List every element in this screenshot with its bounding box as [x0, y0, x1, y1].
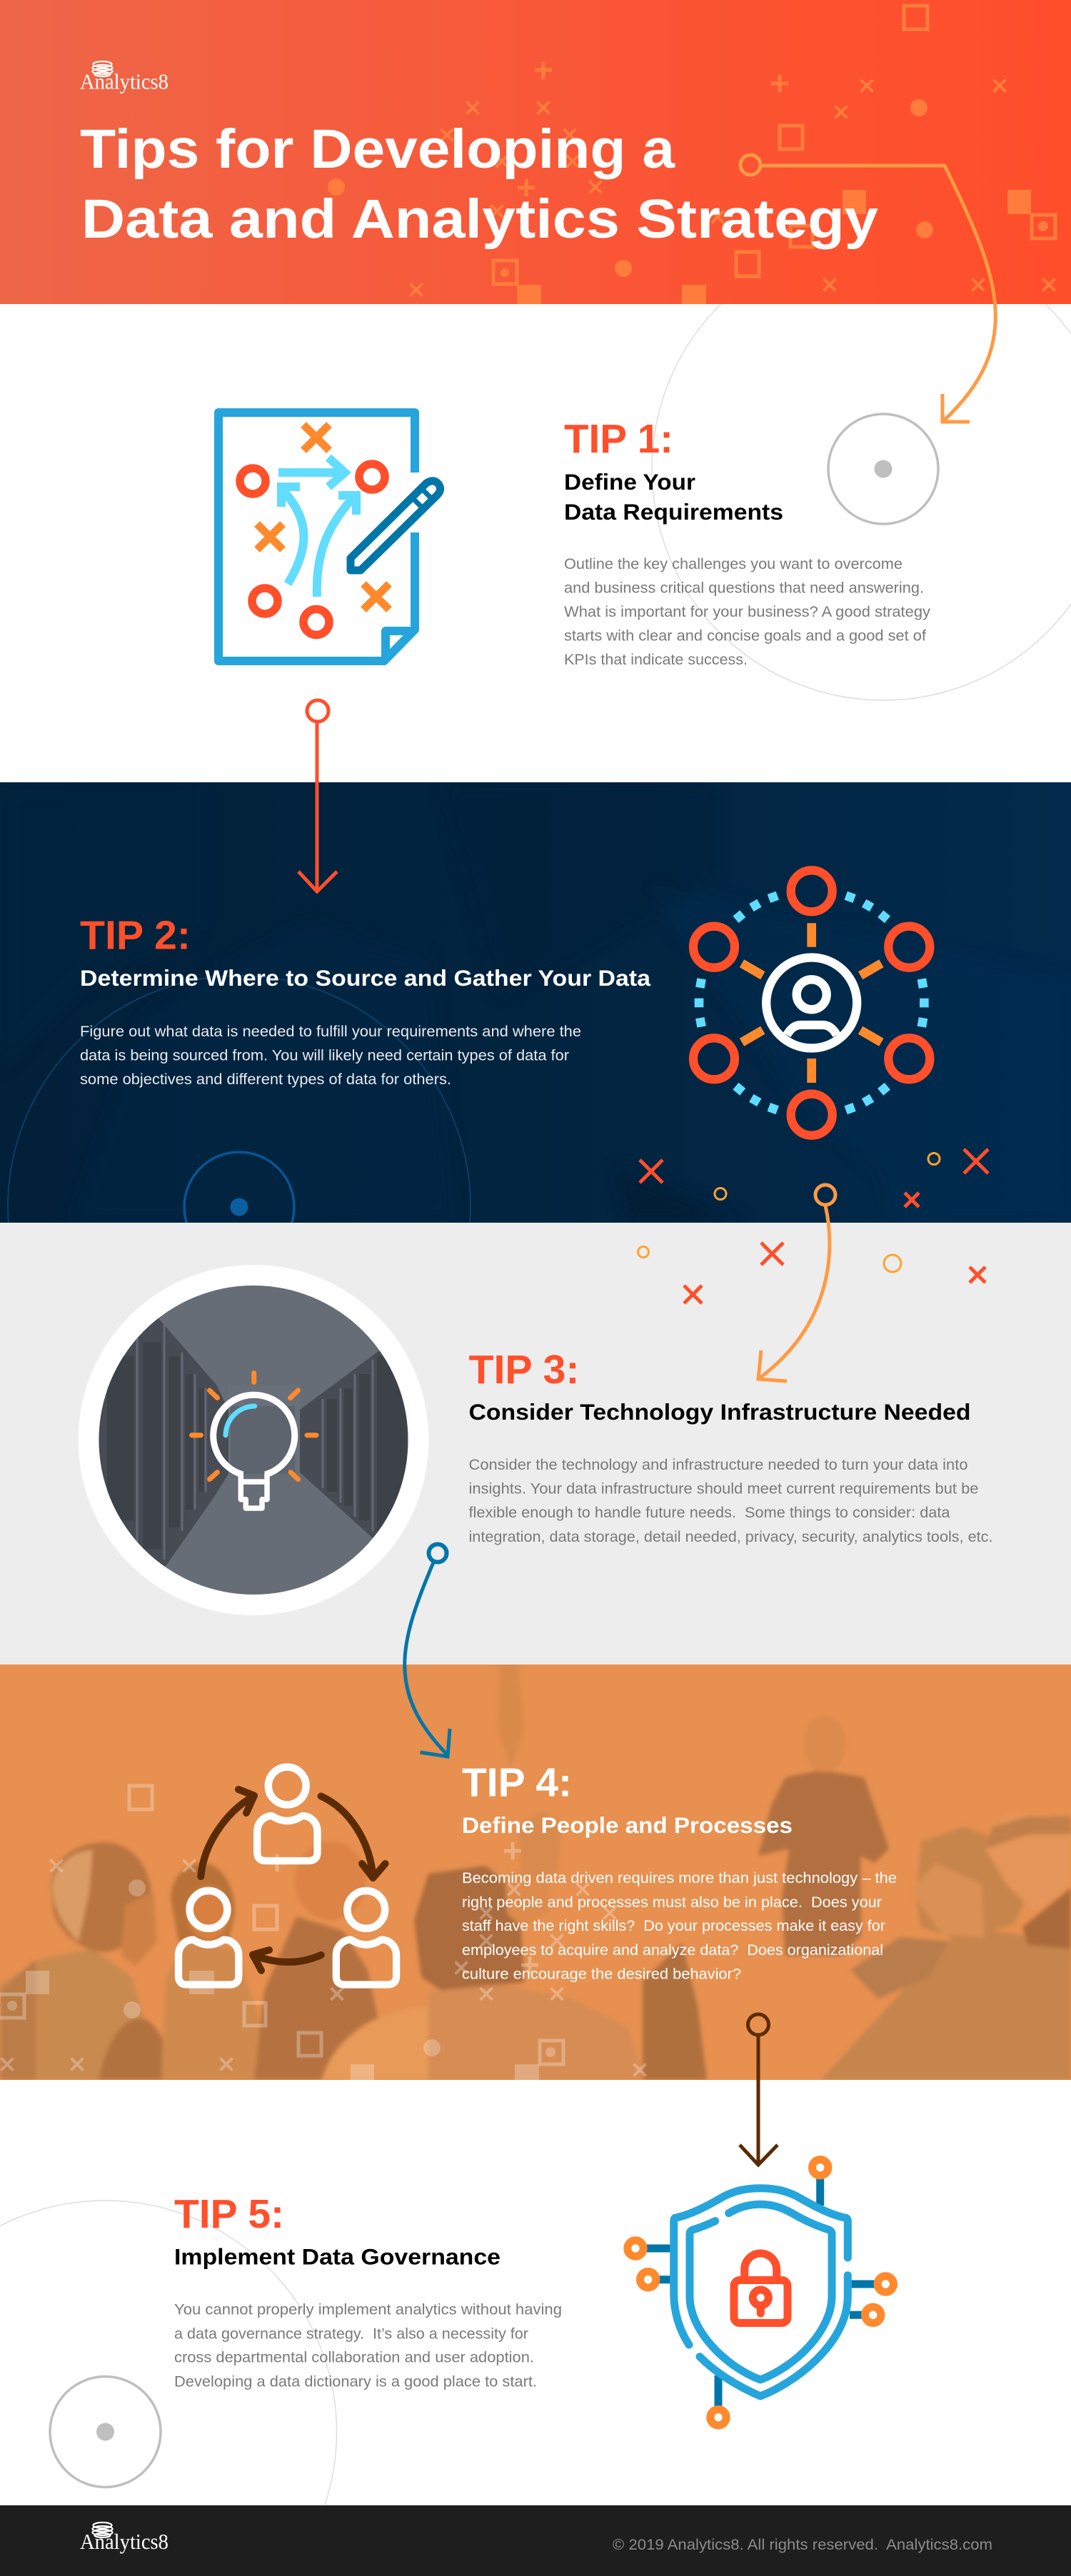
arrow: tip 3 to tip 4 — [405, 1545, 450, 1757]
subheading: tip 1: Data Requirements — [564, 499, 783, 525]
text block: tip 5: Developing a data dictionary is a good place to start. — [174, 2374, 537, 2390]
icon: data source network — [693, 870, 930, 1136]
text block: tip 3: integration, data storage, detail needed, privacy, security, analytics tools, etc. — [468, 1529, 992, 1545]
subheading: tip 3: Consider Technology Infrastructure Needed — [468, 1399, 971, 1425]
panel: tip 3 — [0, 1223, 1071, 1665]
text block: tip 5 — [174, 2301, 562, 2390]
text block: tip 1: KPIs that indicate success. — [564, 652, 748, 668]
arrow: tip 4 to tip 5 — [740, 2014, 778, 2165]
heading: tip 3: TIP 3: — [468, 1347, 580, 1393]
text block: tip 1: starts with clear and concise goals and a good set of — [564, 628, 926, 644]
text block: tip 5: a data governance strategy. It’s also a necessity for — [174, 2325, 528, 2343]
decorative markers: tip 2 — [640, 1149, 988, 1207]
text block: tip 3 — [468, 1457, 992, 1545]
text block: tip 4: right people and processes must also be in place. Does your — [462, 1894, 882, 1911]
icon: lightbulb — [191, 1373, 316, 1508]
photo circle: data center corridor — [79, 1265, 428, 1615]
subheading: tip 2: Determine Where to Source and Gather Your Data — [80, 965, 651, 991]
text block: tip 2 — [80, 1024, 581, 1088]
decorative pattern: squares and crosses — [0, 1786, 645, 2076]
text block: tip 3: Consider the technology and infrastructure needed to turn your data into — [468, 1457, 968, 1473]
subheading: tip 5: Implement Data Governance — [174, 2244, 501, 2270]
arrow: header to tip 1 — [740, 155, 995, 422]
text block: tip 1: What is important for your business? A good strategy — [564, 604, 931, 620]
heading: tip 4: TIP 4: — [462, 1760, 572, 1806]
text block: tip 4: Becoming data driven requires more than just technology – the — [462, 1870, 897, 1886]
text block: tip 1: Outline the key challenges you want to overcome — [564, 556, 902, 572]
decorative markers: tip 3 — [638, 1243, 985, 1303]
icon: security shield — [628, 2160, 894, 2425]
text block: tip 3: insights. Your data infrastructure should meet current requirements but be — [468, 1480, 978, 1497]
heading: tip 1: TIP 1: — [564, 416, 673, 462]
logo: Analytics8: Analytics8 — [80, 69, 169, 94]
text block: tip 1 — [564, 556, 931, 668]
heading: tip 2: TIP 2: — [80, 912, 191, 958]
text block: tip 2: some objectives and different types of data for others. — [80, 1071, 451, 1088]
target circle — [651, 304, 1071, 701]
icon: playbook page with pencil — [218, 413, 441, 661]
arrow: tip 1 to tip 2 — [298, 700, 337, 892]
heading: tip 5: TIP 5: — [174, 2191, 284, 2237]
text block: tip 3: flexible enough to handle future needs. Some things to consider: data — [468, 1505, 950, 1521]
photo: team meeting silhouettes — [0, 1665, 1071, 2080]
title — [80, 118, 878, 250]
subheading: tip 4: Define People and Processes — [462, 1812, 793, 1838]
text block: tip 2: Figure out what data is needed to fulfill your requirements and where the — [80, 1024, 581, 1040]
title: Data and Analytics Strategy — [81, 188, 878, 250]
text block: tip 4: employees to acquire and analyze data? Does organizational — [462, 1942, 883, 1959]
text block: tip 2: data is being sourced from. You will likely need certain types of data for — [80, 1048, 569, 1064]
subheading: tip 1: Define Your — [564, 469, 695, 495]
arrow: tip 2 to tip 3 — [758, 1185, 835, 1381]
panel: tip 4 — [0, 1665, 1071, 2080]
panel: footer — [0, 2505, 1071, 2576]
text block: tip 5: cross departmental collaboration and user adoption. — [174, 2350, 534, 2365]
panel: tip 2 — [0, 782, 1071, 1438]
target circle — [0, 2200, 337, 2505]
panel: header — [0, 0, 1071, 304]
text block: tip 1: and business critical questions that need answering. — [564, 580, 924, 597]
panel: tip 5 — [0, 2156, 897, 2505]
text block: tip 4: staff have the right skills? Do your processes make it easy for — [462, 1918, 885, 1934]
text block: tip 4 — [462, 1870, 897, 1983]
icon: people cycle — [178, 1767, 396, 1984]
subheading: tip 1 — [564, 469, 783, 525]
copyright: © 2019 Analytics8. All rights reserved. Analytics8.com — [613, 2537, 992, 2553]
text block: tip 5: You cannot properly implement analytics without having — [174, 2301, 562, 2318]
panel: tip 1 — [214, 304, 1071, 701]
title: Tips for Developing a — [80, 118, 675, 180]
logo: Analytics8 footer: Analytics8 — [80, 2529, 169, 2554]
text block: tip 4: culture encourage the desired behavior? — [462, 1966, 741, 1983]
